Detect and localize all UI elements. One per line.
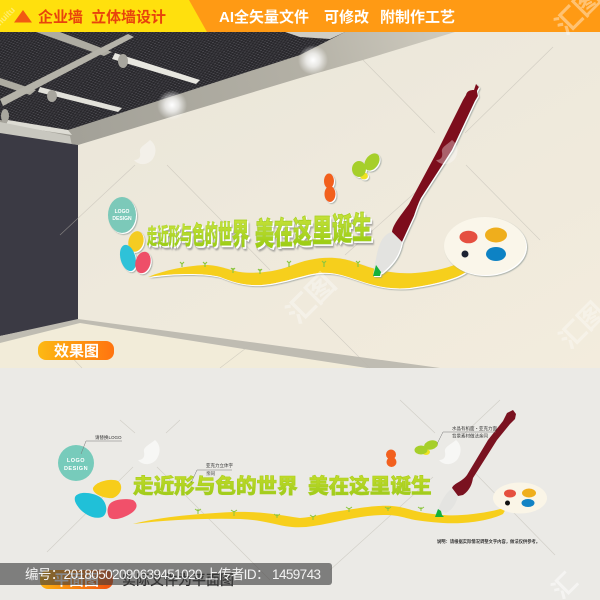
- plan: logo circle: LOGO: [67, 458, 85, 464]
- wall sign: palette: [444, 217, 526, 275]
- plan: callout logo note: 请替换LOGO: [95, 434, 122, 441]
- plan: callout butterfly note: [437, 425, 497, 444]
- background: floor plan panel: [0, 368, 600, 600]
- plan: callout material note: 亲同: [206, 470, 215, 477]
- plan: slogan: 美在这里诞生: [308, 474, 432, 498]
- banner right features: 可修改: [324, 8, 369, 26]
- ceiling with mesh panels and track lights: [0, 32, 455, 146]
- plan: green butterfly: [414, 439, 439, 455]
- banner right features: [219, 8, 455, 26]
- plan: explanation note: 说明：请根据实际情况调整文字内容，做法仅供参考。: [437, 538, 540, 545]
- wall sign: green butterfly: [352, 150, 383, 180]
- wall sign: 3D slogan: 形: [168, 224, 180, 249]
- label pill: effect picture: [38, 341, 114, 360]
- dark left wall: [0, 133, 78, 336]
- wall sign: paintbrush: [373, 84, 479, 276]
- plan: callout logo note: [81, 434, 122, 454]
- wall sign: 3D slogan: 生: [352, 210, 372, 246]
- plan: slogan: [133, 474, 432, 498]
- wall sign: sprouts: [180, 261, 360, 274]
- wall sign: 3D slogan: 美: [255, 216, 274, 252]
- upload info stripe: 编号：20180502090639451020 上传者ID： 1459743: [25, 567, 321, 582]
- plan: sprouts: [195, 507, 424, 520]
- plan: paintbrush: [435, 410, 516, 517]
- icon: warning triangle: [14, 10, 32, 22]
- wall sign: 3D slogan: 世: [218, 220, 232, 250]
- plan caption: 实际文件为平面图: [122, 572, 234, 588]
- plan: logo circle: DESIGN: [64, 466, 88, 472]
- watermark: diagonal guide lines: [47, 47, 555, 580]
- wall sign: 3D slogan: 色: [192, 221, 205, 250]
- floor: [0, 323, 367, 368]
- plan: three petals: [75, 480, 137, 519]
- plan: orange butterfly: [386, 450, 396, 467]
- floor skirting strip: [0, 319, 440, 368]
- plan: callout butterfly note: 背景素材做法余同: [452, 432, 488, 440]
- wall sign: 3D slogan: 界: [232, 218, 249, 251]
- wall sign: 3D slogan: 与: [180, 222, 192, 250]
- plan: callout material note: [191, 462, 233, 483]
- wall sign: 3D slogan: 这: [293, 214, 312, 250]
- plan: yellow wave ribbon: [133, 506, 507, 527]
- wall sign: orange butterfly: [324, 174, 336, 202]
- banner left heading: 企业墙 立体墙设计: [38, 8, 166, 26]
- wall sign: logo badge: LOGO: [115, 209, 129, 215]
- banner right features: AI全矢量文件: [219, 8, 309, 26]
- wall sign: 3D slogan: 诞: [332, 211, 352, 247]
- plan: callout butterfly note: 水晶有机面・亚克力面: [452, 425, 497, 432]
- wall sign: 3D slogan: 里: [312, 213, 332, 249]
- wall sign: three petals: [117, 229, 153, 275]
- label pill: effect picture: 效果图: [54, 342, 99, 360]
- banner right features: 附制作工艺: [380, 8, 455, 26]
- watermark: logos and site mark: 汇图: [280, 268, 342, 329]
- background: wall photo panel: [0, 32, 600, 368]
- label pill: plan view: [40, 570, 113, 589]
- plan: palette: [493, 482, 547, 514]
- wall sign: 3D slogan: [147, 210, 372, 252]
- upload info stripe: [0, 563, 332, 585]
- plan: callout material note: 亚克力立体字: [206, 462, 233, 469]
- wall sign: logo badge: [108, 197, 136, 233]
- label pill: plan view: 平面图: [54, 572, 99, 589]
- wall sign: 3D slogan: 的: [205, 221, 218, 250]
- wall sign: 3D slogan: 走: [147, 226, 157, 249]
- plan: logo circle: [58, 445, 94, 481]
- top banner: [0, 0, 600, 32]
- wall sign: logo badge: DESIGN: [112, 216, 132, 222]
- wall sign: yellow wave ribbon: [148, 258, 466, 289]
- wall sign: 3D slogan: 近: [158, 224, 169, 249]
- wall sign: 3D slogan: 在: [274, 216, 293, 251]
- plan: slogan: 走近形与色的世界: [133, 474, 298, 498]
